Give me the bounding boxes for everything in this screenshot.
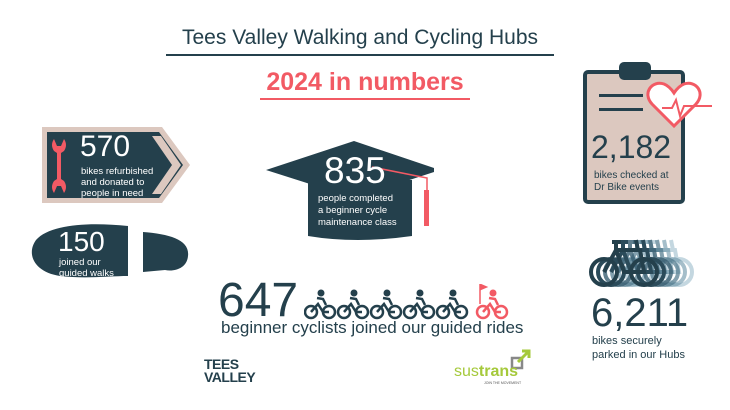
panel: 150 guided walks footprint: 150 [58, 226, 105, 257]
logo: Tees Valley: TEES [204, 356, 239, 372]
panel: 835 graduation cap: maintenance class [318, 217, 397, 228]
panel: 570 bikes refurbished sign: 570 [80, 130, 130, 163]
panel: 2,182 clipboard: Dr Bike events [594, 182, 659, 193]
panel: 2,182 clipboard: bikes checked at [594, 170, 668, 181]
panel: 835 graduation cap: a beginner cycle [318, 205, 387, 216]
logo: sustrans [454, 350, 530, 385]
panel: 570 bikes refurbished sign: people in need [81, 188, 143, 199]
panel: 570 bikes refurbished sign: and donated to [81, 177, 144, 188]
panel: 6,211 bikes parked: parked in our Hubs [592, 349, 685, 361]
panel: 150 guided walks footprint [32, 224, 188, 279]
subtitle: 2024 in numbers [266, 68, 464, 96]
panel: 6,211 bikes parked: 6,211 [591, 291, 688, 335]
panel: 2,182 clipboard [583, 62, 712, 204]
panel: 150 guided walks footprint: guided walks [59, 268, 114, 279]
icon: wrench [52, 139, 66, 193]
logo: sustrans: sustrans [454, 363, 518, 380]
panel: 647 guided rides [218, 274, 523, 337]
panel: 647 guided rides: beginner cyclists joined our guided rides [221, 318, 523, 337]
logo: Tees Valley: VALLEY [204, 369, 255, 385]
panel: 6,211 bikes parked [589, 240, 694, 361]
panel: 835 graduation cap [266, 141, 434, 240]
panel: 647 guided rides: 647 [218, 274, 298, 327]
icon: cyclists row [304, 284, 508, 320]
title: Tees Valley Walking and Cycling Hubs [182, 26, 538, 49]
panel: 2,182 clipboard: 2,182 [591, 129, 671, 165]
panel: 835 graduation cap: people completed [318, 193, 393, 204]
logo: sustrans: JOIN THE MOVEMENT [484, 381, 521, 385]
panel: 150 guided walks footprint: joined our [59, 257, 101, 268]
panel: 570 bikes refurbished sign: bikes refurbished [81, 166, 153, 177]
logo: Tees Valley [204, 356, 256, 385]
panel: 570 bikes refurbished sign [42, 127, 190, 203]
icon: heart [648, 83, 712, 126]
panel: 835 graduation cap: 835 [324, 150, 386, 191]
title [166, 24, 554, 56]
panel: 6,211 bikes parked: bikes securely [592, 335, 662, 347]
